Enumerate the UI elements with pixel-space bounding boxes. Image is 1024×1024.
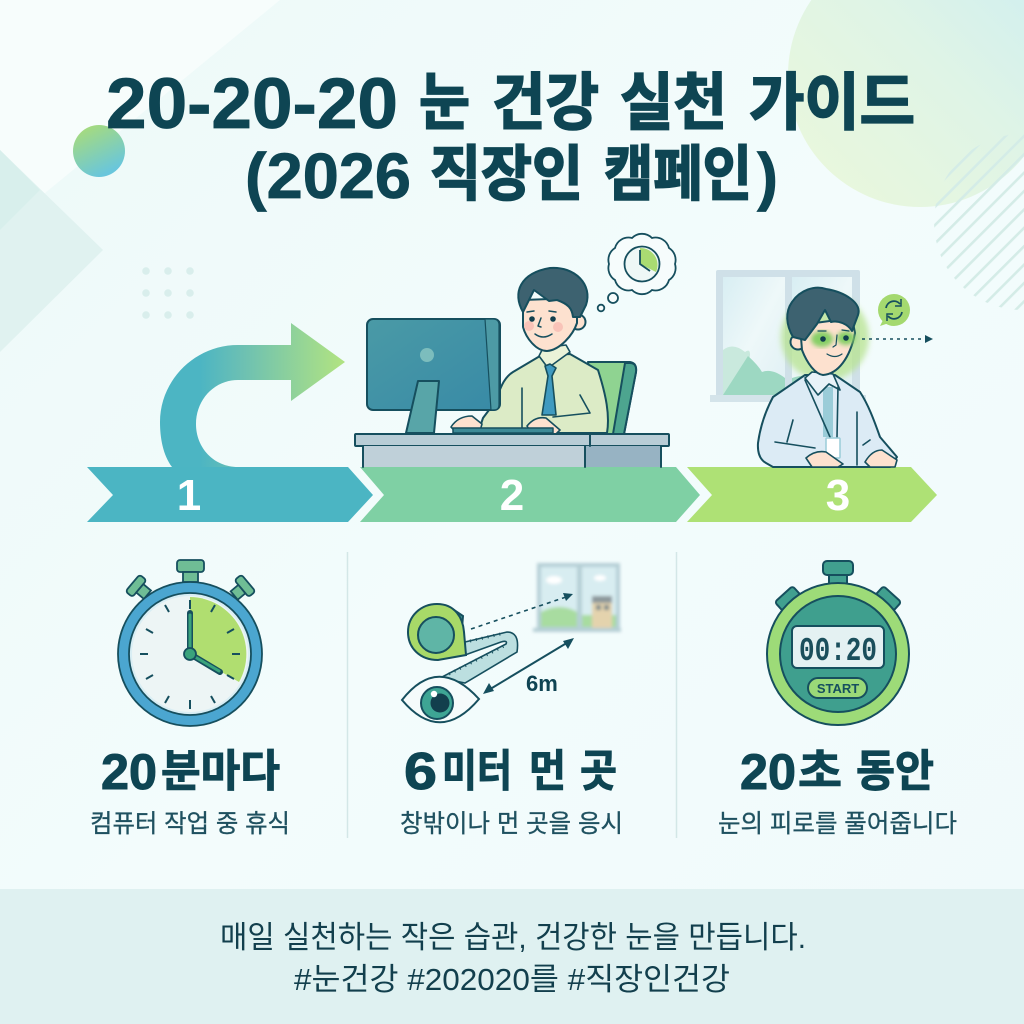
- title: 가이드: [749, 69, 915, 138]
- hands: [806, 450, 897, 467]
- chevron 3: [687, 467, 937, 522]
- head: [523, 298, 577, 351]
- ear: [570, 314, 586, 330]
- step numbers: 1: [177, 471, 201, 520]
- footer band: [0, 889, 1024, 1024]
- column 1 text: 20: [101, 744, 157, 800]
- column 2 text: 미터: [442, 747, 512, 796]
- title: 캠페인: [604, 141, 752, 208]
- column 1 text: [90, 744, 290, 838]
- tape knob: [454, 610, 463, 628]
- body: [758, 375, 897, 467]
- step numbers: 2: [500, 471, 524, 520]
- title: 건강: [492, 69, 599, 138]
- background decoration shapes: [0, 0, 1024, 352]
- step numbers: 3: [826, 471, 850, 520]
- refresh bubble: [878, 294, 910, 326]
- eye: [402, 677, 479, 722]
- column 2 text: 창밖이나 먼 곳을 응시: [400, 810, 623, 838]
- step numbers: [177, 471, 850, 520]
- tape body: [408, 604, 466, 660]
- blurred window: [533, 563, 621, 632]
- column dividers: [348, 552, 676, 838]
- badge: [826, 438, 840, 458]
- icon: digital stopwatch: 00:20: [799, 633, 877, 670]
- face: [524, 316, 563, 332]
- column 2 text: 곳: [580, 747, 617, 796]
- clothing folds: [775, 412, 870, 465]
- title: [106, 65, 915, 212]
- keyboard: [453, 428, 553, 433]
- icon: tape measure, eye and distance: [402, 563, 621, 722]
- lanyard: [805, 380, 838, 437]
- icon: digital stopwatch: START: [817, 681, 859, 696]
- icon: analog stopwatch: [118, 560, 262, 726]
- desk: [355, 434, 669, 446]
- illustration: window: [710, 270, 866, 402]
- title: 20-20-20: [106, 65, 398, 144]
- title: 직장인: [430, 141, 583, 208]
- column 3 text: 눈의 피로를 풀어줍니다: [718, 810, 957, 838]
- monitor stand: [406, 381, 439, 433]
- body: [479, 354, 608, 433]
- column 3 text: 초: [798, 747, 842, 796]
- head: [800, 318, 855, 375]
- monitor: [367, 319, 500, 410]
- icon: digital stopwatch: [767, 561, 909, 725]
- column 2 text: 먼: [529, 747, 566, 796]
- ear: [790, 334, 806, 350]
- tape ribbon: [440, 632, 518, 683]
- column 2 text: 6: [404, 743, 437, 801]
- clothing folds: [522, 388, 590, 428]
- title: (2026: [245, 140, 411, 212]
- column 3 text: 동안: [856, 747, 934, 796]
- title: 눈: [419, 69, 470, 138]
- distance arrow: [487, 641, 570, 691]
- column 2 text: [400, 743, 623, 838]
- collar: [539, 345, 570, 368]
- column 3 text: 20: [740, 744, 796, 800]
- chevron 1: [87, 467, 373, 522]
- hair: [518, 268, 588, 317]
- chair: [588, 362, 636, 434]
- column 1 text: 컴퓨터 작업 중 휴식: [90, 810, 290, 838]
- tie: [823, 387, 833, 437]
- footer message: 매일 실천하는 작은 습관, 건강한 눈을 만듭니다.: [220, 920, 806, 955]
- dotted gaze arrow: [862, 335, 933, 343]
- tape ticks: [449, 633, 506, 674]
- title: 실천: [620, 69, 727, 138]
- dashed sight arrow: [471, 597, 566, 629]
- collar: [805, 372, 840, 395]
- illustration: worker at desk: [355, 268, 669, 467]
- column 3 text: [718, 744, 957, 838]
- step chevron bar: [87, 467, 937, 522]
- illustration: worker looking far: [758, 288, 897, 467]
- thought bubble with clock: [598, 234, 676, 311]
- title: ): [757, 140, 778, 212]
- hair: [787, 288, 859, 340]
- curved arrow: [160, 323, 345, 467]
- eye glow: [781, 293, 869, 381]
- hands: [451, 416, 560, 434]
- 6m label: 6m: [526, 671, 558, 696]
- tie: [542, 364, 556, 415]
- chevron 2: [360, 467, 700, 522]
- green eye zone: [811, 331, 855, 347]
- hashtags: #눈건강 #202020를 #직장인건강: [294, 962, 730, 997]
- column 1 text: 분마다: [161, 747, 280, 796]
